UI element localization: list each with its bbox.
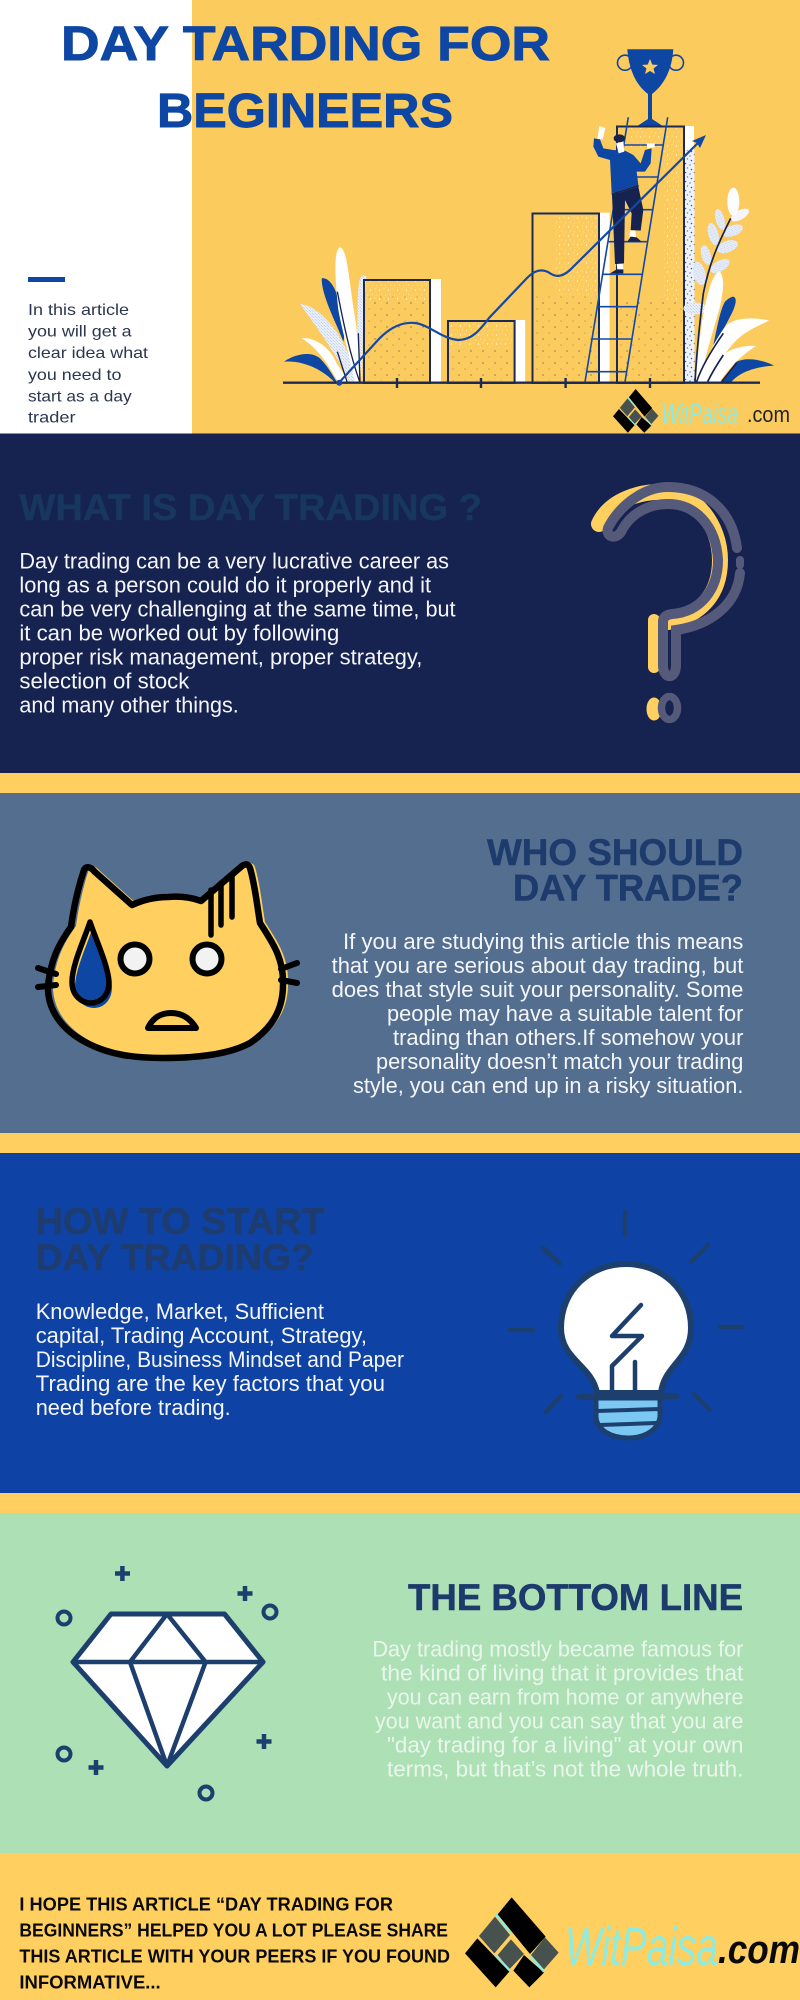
title: BEGINEERS	[157, 85, 453, 138]
intro text: start as a day	[28, 389, 132, 406]
icon: diamond with sparkles	[58, 1566, 276, 1800]
icon: question mark	[599, 487, 740, 720]
body text: the kind of living that it provides that	[381, 1661, 743, 1686]
heading: HOW TO START	[36, 1201, 325, 1242]
illustration: right plant	[683, 188, 774, 382]
illustration: ladder	[585, 117, 668, 382]
body text: Discipline, Business Mindset and Paper	[36, 1347, 404, 1372]
closing message: BEGINNERS” HELPED YOU A LOT PLEASE SHARE	[19, 1921, 448, 1941]
heading: DAY TRADE?	[513, 868, 743, 909]
intro text: In this article	[28, 302, 129, 319]
body text: you can earn from home or anywhere	[387, 1685, 743, 1710]
title	[61, 18, 550, 138]
body text: trading than others.If somehow your	[393, 1025, 743, 1050]
divider band	[0, 773, 800, 793]
body text: "day trading for a living" at your own	[387, 1733, 743, 1758]
body text: personality doesn’t match your trading	[376, 1049, 743, 1074]
illustration: trophy	[618, 49, 684, 125]
body text: Day trading can be a very lucrative career as	[19, 548, 449, 573]
logo: header: .com	[747, 402, 790, 427]
panel: footer	[0, 1853, 800, 2000]
heading: DAY TRADING?	[36, 1237, 314, 1278]
illustration: growth arrow	[336, 135, 706, 386]
body text: can be very challenging at the same time, but	[19, 596, 456, 621]
body text	[332, 929, 743, 1098]
intro text	[28, 302, 149, 427]
body text: you want and you can say that you are	[375, 1709, 743, 1734]
body text: selection of stock	[19, 668, 190, 693]
body text: people may have a suitable talent for	[387, 1001, 743, 1026]
body text: long as a person could do it properly and it	[19, 572, 431, 597]
body text: that you are serious about day trading, but	[332, 953, 743, 978]
closing message: INFORMATIVE...	[19, 1973, 161, 1993]
heading: WHO SHOULD	[487, 832, 743, 873]
intro text: trader	[28, 410, 76, 427]
logo: header: WitPaisa	[661, 398, 738, 429]
body text: style, you can end up in a risky situation.	[353, 1073, 743, 1098]
illustration: axis	[283, 378, 760, 388]
illustration: bars	[364, 126, 694, 383]
body text: proper risk management, proper strategy,	[19, 644, 422, 669]
heading: WHAT IS DAY TRADING ?	[19, 487, 482, 528]
icon: light bulb	[510, 1212, 742, 1438]
body text: Knowledge, Market, Sufficient	[36, 1299, 324, 1324]
title: DAY TARDING FOR	[61, 18, 550, 71]
body text: Day trading mostly became famous for	[372, 1637, 743, 1662]
intro text: you need to	[28, 367, 122, 384]
accent bar	[28, 277, 65, 282]
panel: the bottom line	[0, 1513, 800, 1853]
heading	[487, 832, 743, 909]
panel: how to start day trading	[0, 1153, 800, 1493]
logo: header	[613, 389, 790, 433]
panel: what is day trading	[0, 434, 800, 774]
body text: terms, but that’s not the whole truth.	[387, 1757, 743, 1782]
body text: need before trading.	[36, 1395, 231, 1420]
body text: If you are studying this article this means	[343, 929, 743, 954]
heading: THE BOTTOM LINE	[408, 1577, 743, 1618]
closing message	[19, 1895, 450, 1993]
illustration: climbing person	[593, 126, 655, 273]
body text: it can be worked out by following	[19, 620, 339, 645]
panel: who should day trade	[0, 793, 800, 1133]
logo: footer: WitPaisa	[565, 1917, 718, 1977]
intro text: clear idea what	[28, 345, 149, 362]
body text: Trading are the key factors that you	[36, 1371, 385, 1396]
body text: and many other things.	[19, 692, 239, 717]
heading	[36, 1201, 325, 1278]
divider band	[0, 1133, 800, 1153]
divider band	[0, 1493, 800, 1513]
body text	[19, 548, 456, 717]
panel: header	[0, 0, 800, 434]
illustration: left plant	[284, 247, 367, 383]
closing message: I HOPE THIS ARTICLE “DAY TRADING FOR	[19, 1895, 393, 1915]
body text	[372, 1637, 743, 1782]
closing message: THIS ARTICLE WITH YOUR PEERS IF YOU FOUND	[19, 1947, 450, 1967]
body text: capital, Trading Account, Strategy,	[36, 1323, 367, 1348]
logo: footer	[465, 1897, 800, 1987]
body text	[36, 1299, 404, 1420]
intro text: you will get a	[28, 324, 132, 341]
body text: does that style suit your personality. Some	[332, 977, 743, 1002]
icon: worried cat	[38, 863, 297, 1058]
